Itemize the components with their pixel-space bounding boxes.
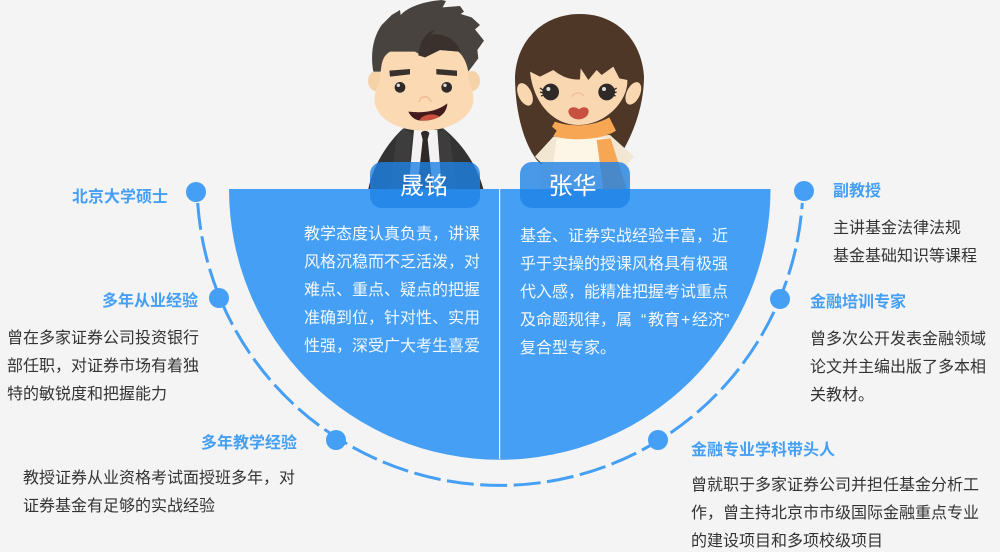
block: 多年教学经验: 证券基金有足够的实战经验 xyxy=(23,497,215,515)
block: 副教授 xyxy=(833,181,977,265)
text: 晟铭 description: 性强，深受广大考生喜爱 xyxy=(304,337,480,355)
text: 张华 description: 乎于实操的授课风格具有极强 xyxy=(520,255,728,273)
name badge: 张华 xyxy=(520,162,630,208)
text: 晟铭 description: 准确到位，针对性、实用 xyxy=(304,309,480,327)
block: 金融培训专家: 关教材。 xyxy=(810,386,874,404)
block: 金融专业学科带头人: 作，曾主持北京市市级国际金融重点专业 xyxy=(691,504,979,522)
text: 张华 description: 基金、证券实战经验丰富，近 xyxy=(520,227,728,245)
name badge: 晟铭 xyxy=(370,162,480,208)
name badge: 张华: 张华 xyxy=(548,173,596,200)
text: 张华 description: + xyxy=(681,312,690,329)
text: 晟铭 description: 风格沉稳而不乏活泼，对 xyxy=(304,253,480,271)
block: 多年教学经验 xyxy=(23,433,297,515)
block: 金融培训专家: 曾多次公开发表金融领域 xyxy=(810,330,986,348)
text: 晟铭 description: 教学态度认真负责，讲课 xyxy=(304,225,480,243)
block: 多年从业经验: 曾在多家证券公司投资银行 xyxy=(7,329,199,347)
block: 多年从业经验 xyxy=(7,291,199,403)
block: 多年从业经验: 特的敏锐度和把握能力 xyxy=(7,385,167,403)
block: 金融培训专家: 论文并主编出版了多本相 xyxy=(810,358,986,376)
heading: 北京大学硕士: 北京大学硕士 xyxy=(72,187,168,206)
character: female teacher xyxy=(514,14,644,189)
text: 张华 description: ” xyxy=(724,312,729,329)
text: 张华 description: 及命题规律，属 xyxy=(520,312,632,329)
block: 副教授: 副教授 xyxy=(833,181,881,200)
block: 金融专业学科带头人: 曾就职于多家证券公司并担任基金分析工 xyxy=(691,476,979,494)
text: 晟铭 description: 难点、重点、疑点的把握 xyxy=(304,281,480,299)
block: 多年教学经验: 多年教学经验 xyxy=(201,433,297,452)
block: 副教授: 基金基础知识等课程 xyxy=(833,247,977,265)
block: 金融专业学科带头人 xyxy=(691,440,979,550)
text: 晟铭 description xyxy=(304,225,480,355)
dashed arc timeline xyxy=(198,203,802,485)
block: 金融专业学科带头人: 的建设项目和多项校级项目 xyxy=(691,532,883,550)
block: 金融培训专家 xyxy=(810,292,986,404)
text: 张华 description: 经济 xyxy=(692,311,724,329)
timeline dots xyxy=(186,181,814,450)
block: 金融培训专家: 金融培训专家 xyxy=(810,292,906,311)
text: 张华 description: 代入感，能精准把握考试重点 xyxy=(520,283,728,301)
text: 张华 description: “ xyxy=(641,312,646,329)
block: 金融专业学科带头人: 金融专业学科带头人 xyxy=(691,440,835,459)
text: 张华 description: 教育 xyxy=(648,311,680,329)
block: 副教授: 主讲基金法律法规 xyxy=(833,219,961,237)
block: 多年从业经验: 多年从业经验 xyxy=(102,291,198,310)
block: 多年教学经验: 教授证券从业资格考试面授班多年，对 xyxy=(23,469,295,487)
semicircle panel xyxy=(229,189,770,460)
name badge: 晟铭: 晟铭 xyxy=(400,173,448,200)
block: 多年从业经验: 部任职，对证券市场有着独 xyxy=(7,357,199,375)
character: male teacher xyxy=(368,0,484,189)
text: 张华 description xyxy=(520,227,729,357)
text: 张华 description: 复合型专家。 xyxy=(520,339,616,357)
